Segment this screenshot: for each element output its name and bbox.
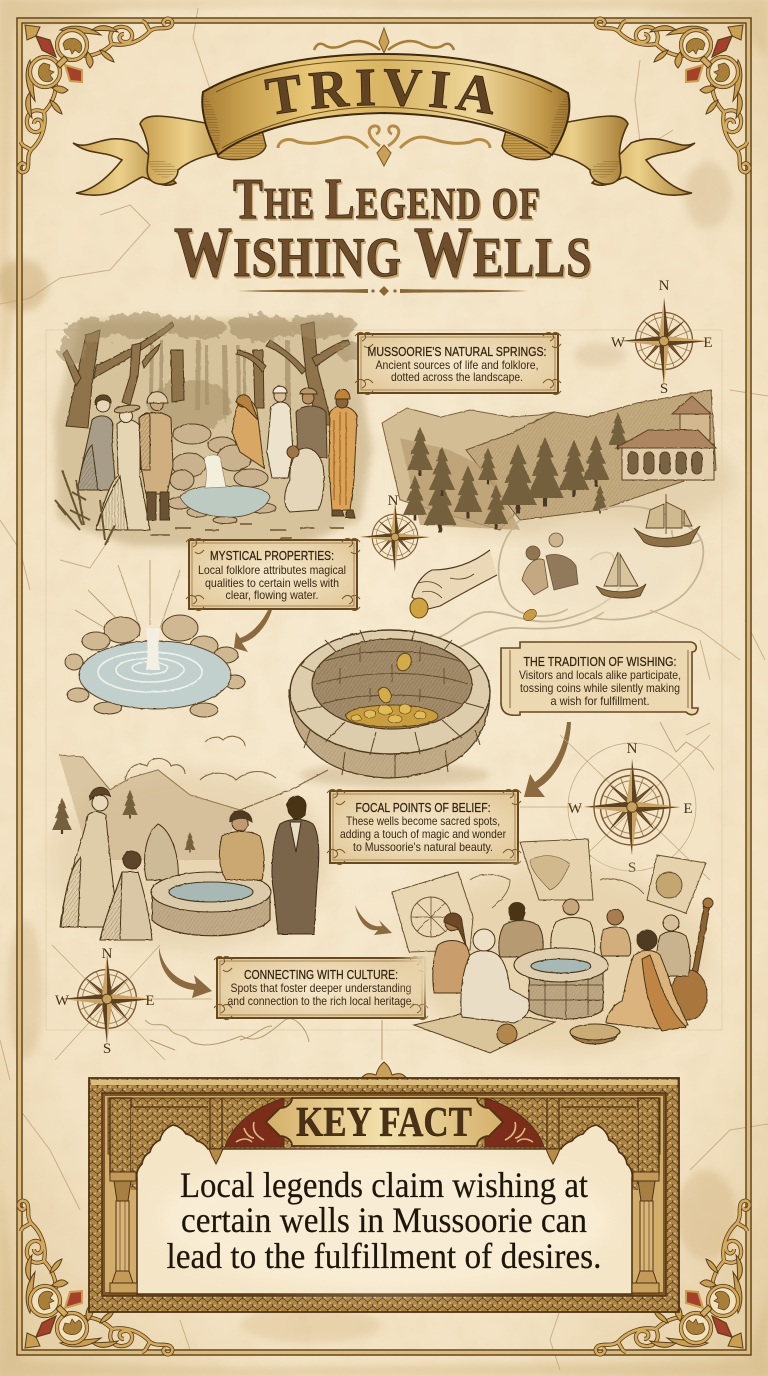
couple vision — [522, 533, 578, 595]
outer frame — [89, 1078, 679, 1312]
sitar — [671, 898, 713, 1020]
callout: tradition of wishing (scroll): Visitors and locals alike participate, — [519, 668, 681, 682]
title divider — [238, 286, 528, 296]
coconut — [497, 1024, 517, 1044]
callout: natural springs: Ancient sources of life and folklore, — [376, 358, 538, 372]
arrow: tradition to focal points — [524, 722, 571, 797]
flourish above banner — [314, 28, 454, 53]
hand — [412, 550, 497, 609]
banner label: TRIVIA — [264, 68, 494, 115]
mid forest shrubs — [148, 379, 232, 431]
callout: mystical properties — [186, 538, 360, 611]
woman in dress — [60, 787, 118, 927]
mountains — [382, 408, 560, 530]
spring pool and waterfall — [180, 486, 270, 517]
right column — [632, 1172, 659, 1293]
compass: bottom left — [52, 945, 212, 1060]
small stone well — [151, 872, 271, 936]
corner ornament: top right — [596, 19, 749, 172]
inner patterned lintel — [108, 1098, 660, 1154]
ground tufts — [150, 524, 344, 538]
well rim — [290, 630, 490, 754]
scene: radiant spring pool — [65, 560, 245, 717]
compass: right — [520, 735, 710, 880]
arrow: praying family to culture callout — [159, 947, 212, 998]
callout: tradition of wishing (scroll): THE TRADITION OF WISHING: — [524, 654, 676, 669]
corner ornament: top left — [19, 19, 172, 172]
compass: right: S — [628, 860, 636, 876]
arrow: mystical properties to spring — [234, 610, 272, 652]
right pilaster — [638, 1098, 659, 1174]
main trees — [63, 322, 350, 428]
compass: centre small: N — [388, 493, 399, 509]
compass: bottom left: W — [55, 993, 70, 1009]
lintel drop left — [209, 1149, 223, 1164]
water — [79, 641, 231, 709]
arrow: focal points to culture scene — [355, 905, 392, 935]
callout: connecting with culture — [214, 956, 428, 1020]
faint map lines right — [660, 722, 714, 770]
ship vision bottom — [596, 552, 646, 598]
lintel drop right — [546, 1149, 560, 1164]
callout: mystical properties: clear, flowing water. — [226, 588, 318, 602]
scene: hand dropping coin and wish vision — [410, 494, 703, 652]
compass: bottom left: N — [102, 946, 113, 962]
compass: top right: S — [660, 381, 668, 397]
key fact body text: lead to the fulfillment of desires. — [166, 1236, 602, 1276]
callout: mystical properties: qualities to certain wells with — [205, 576, 339, 590]
background trunks — [149, 340, 291, 415]
callout: connecting with culture: CONNECTING WITH CULTURE: — [244, 967, 398, 982]
well interior — [312, 639, 472, 729]
turbaned man front — [461, 929, 529, 1023]
key fact body text — [166, 1165, 602, 1276]
callout: focal points of belief: These wells become sacred spots, — [346, 814, 500, 828]
key fact body text: certain wells in Mussoorie can — [181, 1200, 587, 1240]
corner ornament: bottom left — [19, 1201, 172, 1354]
left red spandrel — [225, 1098, 284, 1147]
wish smoke — [432, 506, 703, 652]
callout: focal points of belief — [327, 789, 521, 865]
Indian villagers group — [232, 386, 357, 518]
top crest — [360, 1062, 408, 1080]
stone well — [514, 948, 608, 1020]
man in suit — [272, 796, 319, 934]
scene: Mussoorie hills with colonial house — [382, 390, 735, 540]
rocks — [168, 424, 276, 524]
callout: focal points of belief: to Mussoorie's natural beauty. — [353, 840, 493, 854]
ribbon banner: TRIVIA — [72, 26, 696, 196]
maps — [392, 839, 706, 952]
floating coin — [521, 607, 539, 623]
left fold curl — [206, 122, 266, 160]
plaque heading: KEY FACT — [296, 1100, 472, 1146]
vertical lintel pilasters — [133, 1098, 636, 1148]
title: The Legend of Wishing Wells — [174, 168, 592, 296]
compass: right: N — [627, 741, 638, 757]
faint map bottom — [145, 1019, 382, 1060]
main ribbon body — [202, 54, 569, 155]
callout: natural springs — [355, 332, 561, 395]
callout: mystical properties: MYSTICAL PROPERTIES: — [210, 548, 334, 563]
compass: right: W — [568, 801, 583, 817]
child — [100, 851, 152, 940]
scene: families praying at well — [50, 736, 330, 950]
callout: mystical properties: Local folklore attributes magical — [198, 563, 346, 577]
well shadow grass — [300, 763, 490, 787]
compass: right: E — [683, 801, 693, 817]
compass: top right: E — [703, 335, 713, 351]
pine forest — [403, 413, 628, 532]
woman front right with scarf — [606, 930, 688, 1031]
callout: tradition of wishing (scroll): tossing coins while silently making — [520, 681, 680, 695]
right fold curl — [502, 122, 562, 160]
callout: focal points of belief: FOCAL POINTS OF BELIEF: — [356, 800, 490, 815]
title: The Legend of Wishing Wells: WISHING WELLS — [174, 213, 592, 292]
rocks around pool — [65, 615, 245, 717]
coin pile — [346, 705, 438, 727]
ferns — [55, 470, 115, 545]
woman in sari — [219, 811, 264, 880]
callout: natural springs: MUSSOORIE'S NATURAL SPRINGS: — [368, 344, 546, 359]
colonial house — [616, 396, 716, 480]
left ribbon fold — [140, 116, 242, 184]
scene: stone wishing well with coins — [289, 630, 490, 787]
parchment opening — [137, 1125, 632, 1294]
compass: centre small — [360, 493, 430, 572]
ship vision top — [634, 494, 700, 547]
falling coins — [394, 651, 414, 673]
key fact body text: Local legends claim wishing at — [180, 1165, 588, 1205]
callout: focal points of belief: adding a touch of magic and wonder — [340, 827, 506, 841]
plaque — [266, 1098, 503, 1146]
right red spandrel — [485, 1098, 544, 1147]
callout: connecting with culture: and connection to the rich local heritage. — [228, 994, 414, 1008]
right ribbon tail — [592, 139, 695, 195]
compass: top right: N — [659, 278, 670, 294]
left ribbon tail — [73, 139, 176, 195]
mountains and clouds — [59, 736, 328, 810]
corner ornament: bottom right — [596, 1201, 749, 1354]
callout: tradition of wishing (scroll): a wish for fulfillment. — [550, 694, 650, 708]
scene: community around well with maps — [392, 839, 713, 1055]
compass: top right: W — [611, 335, 626, 351]
callout: tradition of wishing (scroll) — [501, 642, 698, 715]
callout: connecting with culture: Spots that foster deeper understanding — [230, 981, 412, 995]
flourish below banner — [278, 126, 490, 166]
arch fill — [131, 1108, 638, 1190]
panel: key fact — [89, 1062, 679, 1312]
compass: top right — [574, 278, 713, 397]
veiled woman — [144, 824, 178, 880]
falling coin in hand — [410, 598, 428, 618]
compass: bottom left: S — [103, 1041, 111, 1057]
carpet — [414, 1010, 555, 1053]
food bowl — [570, 1024, 620, 1044]
right ribbon fold — [526, 116, 628, 184]
scene: people at forest spring — [54, 313, 372, 546]
Victorian group — [78, 392, 173, 530]
callout: natural springs: dotted across the landscape. — [391, 370, 523, 384]
compass: bottom left: E — [145, 993, 155, 1009]
left pilaster — [110, 1098, 131, 1174]
left column — [110, 1172, 137, 1293]
seated people back row — [433, 899, 690, 993]
tree canopy — [58, 313, 366, 364]
well wall — [289, 690, 490, 778]
title: The Legend of Wishing Wells: THE LEGEND OF — [233, 168, 541, 231]
